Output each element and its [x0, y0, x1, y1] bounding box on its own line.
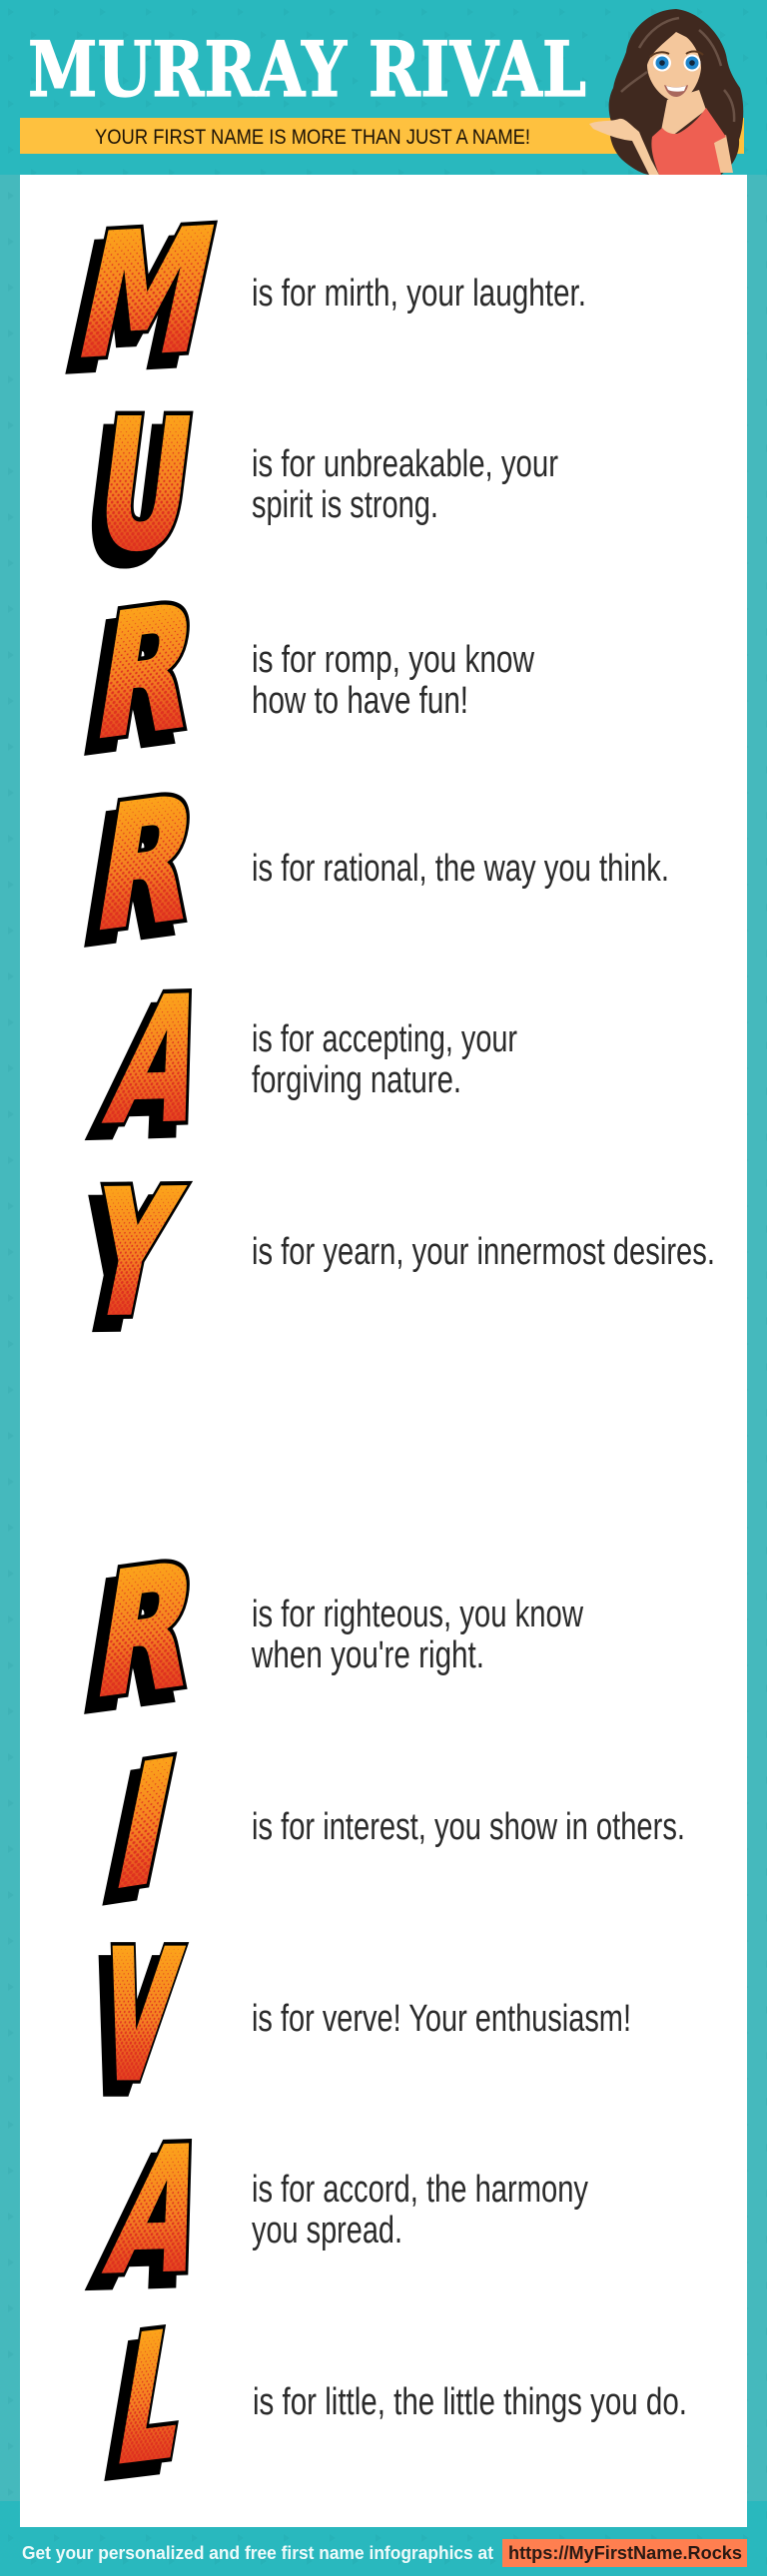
text: accepting: forgiving nature.: [252, 1059, 461, 1101]
row: V: [89, 1915, 631, 2117]
row: R: [85, 759, 669, 968]
tagline banner: [20, 118, 744, 154]
footer call to action: Get your personalized and free first name infographics at: [22, 2543, 493, 2563]
letter A: A: [92, 961, 226, 1162]
row: Y: [74, 1156, 715, 1350]
text: accord: you spread.: [252, 2210, 402, 2252]
text: accord: [252, 2169, 588, 2252]
text: unbreakable: [252, 443, 558, 526]
letter M: M: [62, 193, 232, 397]
row: U: [88, 383, 558, 588]
letter L: L: [107, 2296, 198, 2501]
footer url badge: https://MyFirstName.Rocks: [508, 2543, 742, 2563]
letter M: M: [62, 193, 232, 397]
letter R: R: [85, 567, 209, 777]
row: M: [62, 193, 586, 397]
text: righteous: [251, 1594, 583, 1676]
tagline banner: YOUR FIRST NAME IS MORE THAN JUST A NAME!: [95, 126, 530, 149]
row: L: [107, 2296, 687, 2501]
row: R: [85, 567, 534, 777]
text: mirth: is for mirth, your laughter.: [252, 273, 586, 315]
letter R: R: [85, 567, 209, 777]
letter V: V: [89, 1915, 188, 2117]
letter Y: Y: [74, 1156, 190, 1350]
text: accepting: [252, 1018, 517, 1101]
letter R: R: [85, 1526, 209, 1735]
row: A: [92, 2111, 588, 2312]
text: righteous: when you're right.: [251, 1634, 484, 1676]
letter Y: Y: [74, 1156, 190, 1350]
row: R: [85, 1526, 583, 1735]
text: verve: is for verve! Your enthusiasm!: [252, 1998, 631, 2040]
letter V: V: [89, 1915, 188, 2117]
letter L: L: [107, 2296, 198, 2501]
text: unbreakable: is for unbreakable, your: [252, 443, 558, 485]
title: MURRAY RIVAL: [28, 25, 586, 114]
text: unbreakable: spirit is strong.: [252, 484, 438, 526]
letter R: R: [85, 1526, 209, 1735]
row: I: [101, 1725, 685, 1928]
letter R: R: [85, 759, 209, 968]
letter A: A: [92, 961, 226, 1162]
text: romp: [252, 639, 534, 722]
footer url badge: [502, 2539, 747, 2567]
letter A: A: [92, 2111, 226, 2312]
letter I: I: [101, 1725, 190, 1928]
letter R: R: [85, 759, 209, 968]
letter I: I: [101, 1725, 190, 1928]
letter U: U: [88, 383, 203, 588]
text: accepting: is for accepting, your: [252, 1018, 517, 1060]
text: romp: how to have fun!: [252, 680, 468, 722]
letter U: U: [88, 383, 203, 588]
text: romp: is for romp, you know: [252, 639, 534, 681]
text: righteous: is for righteous, you know: [252, 1594, 583, 1635]
letter A: A: [92, 2111, 226, 2312]
text: accord: is for accord, the harmony: [252, 2169, 588, 2211]
illustration: smiling woman with long brown hair: [589, 9, 743, 175]
row: A: [92, 961, 517, 1162]
